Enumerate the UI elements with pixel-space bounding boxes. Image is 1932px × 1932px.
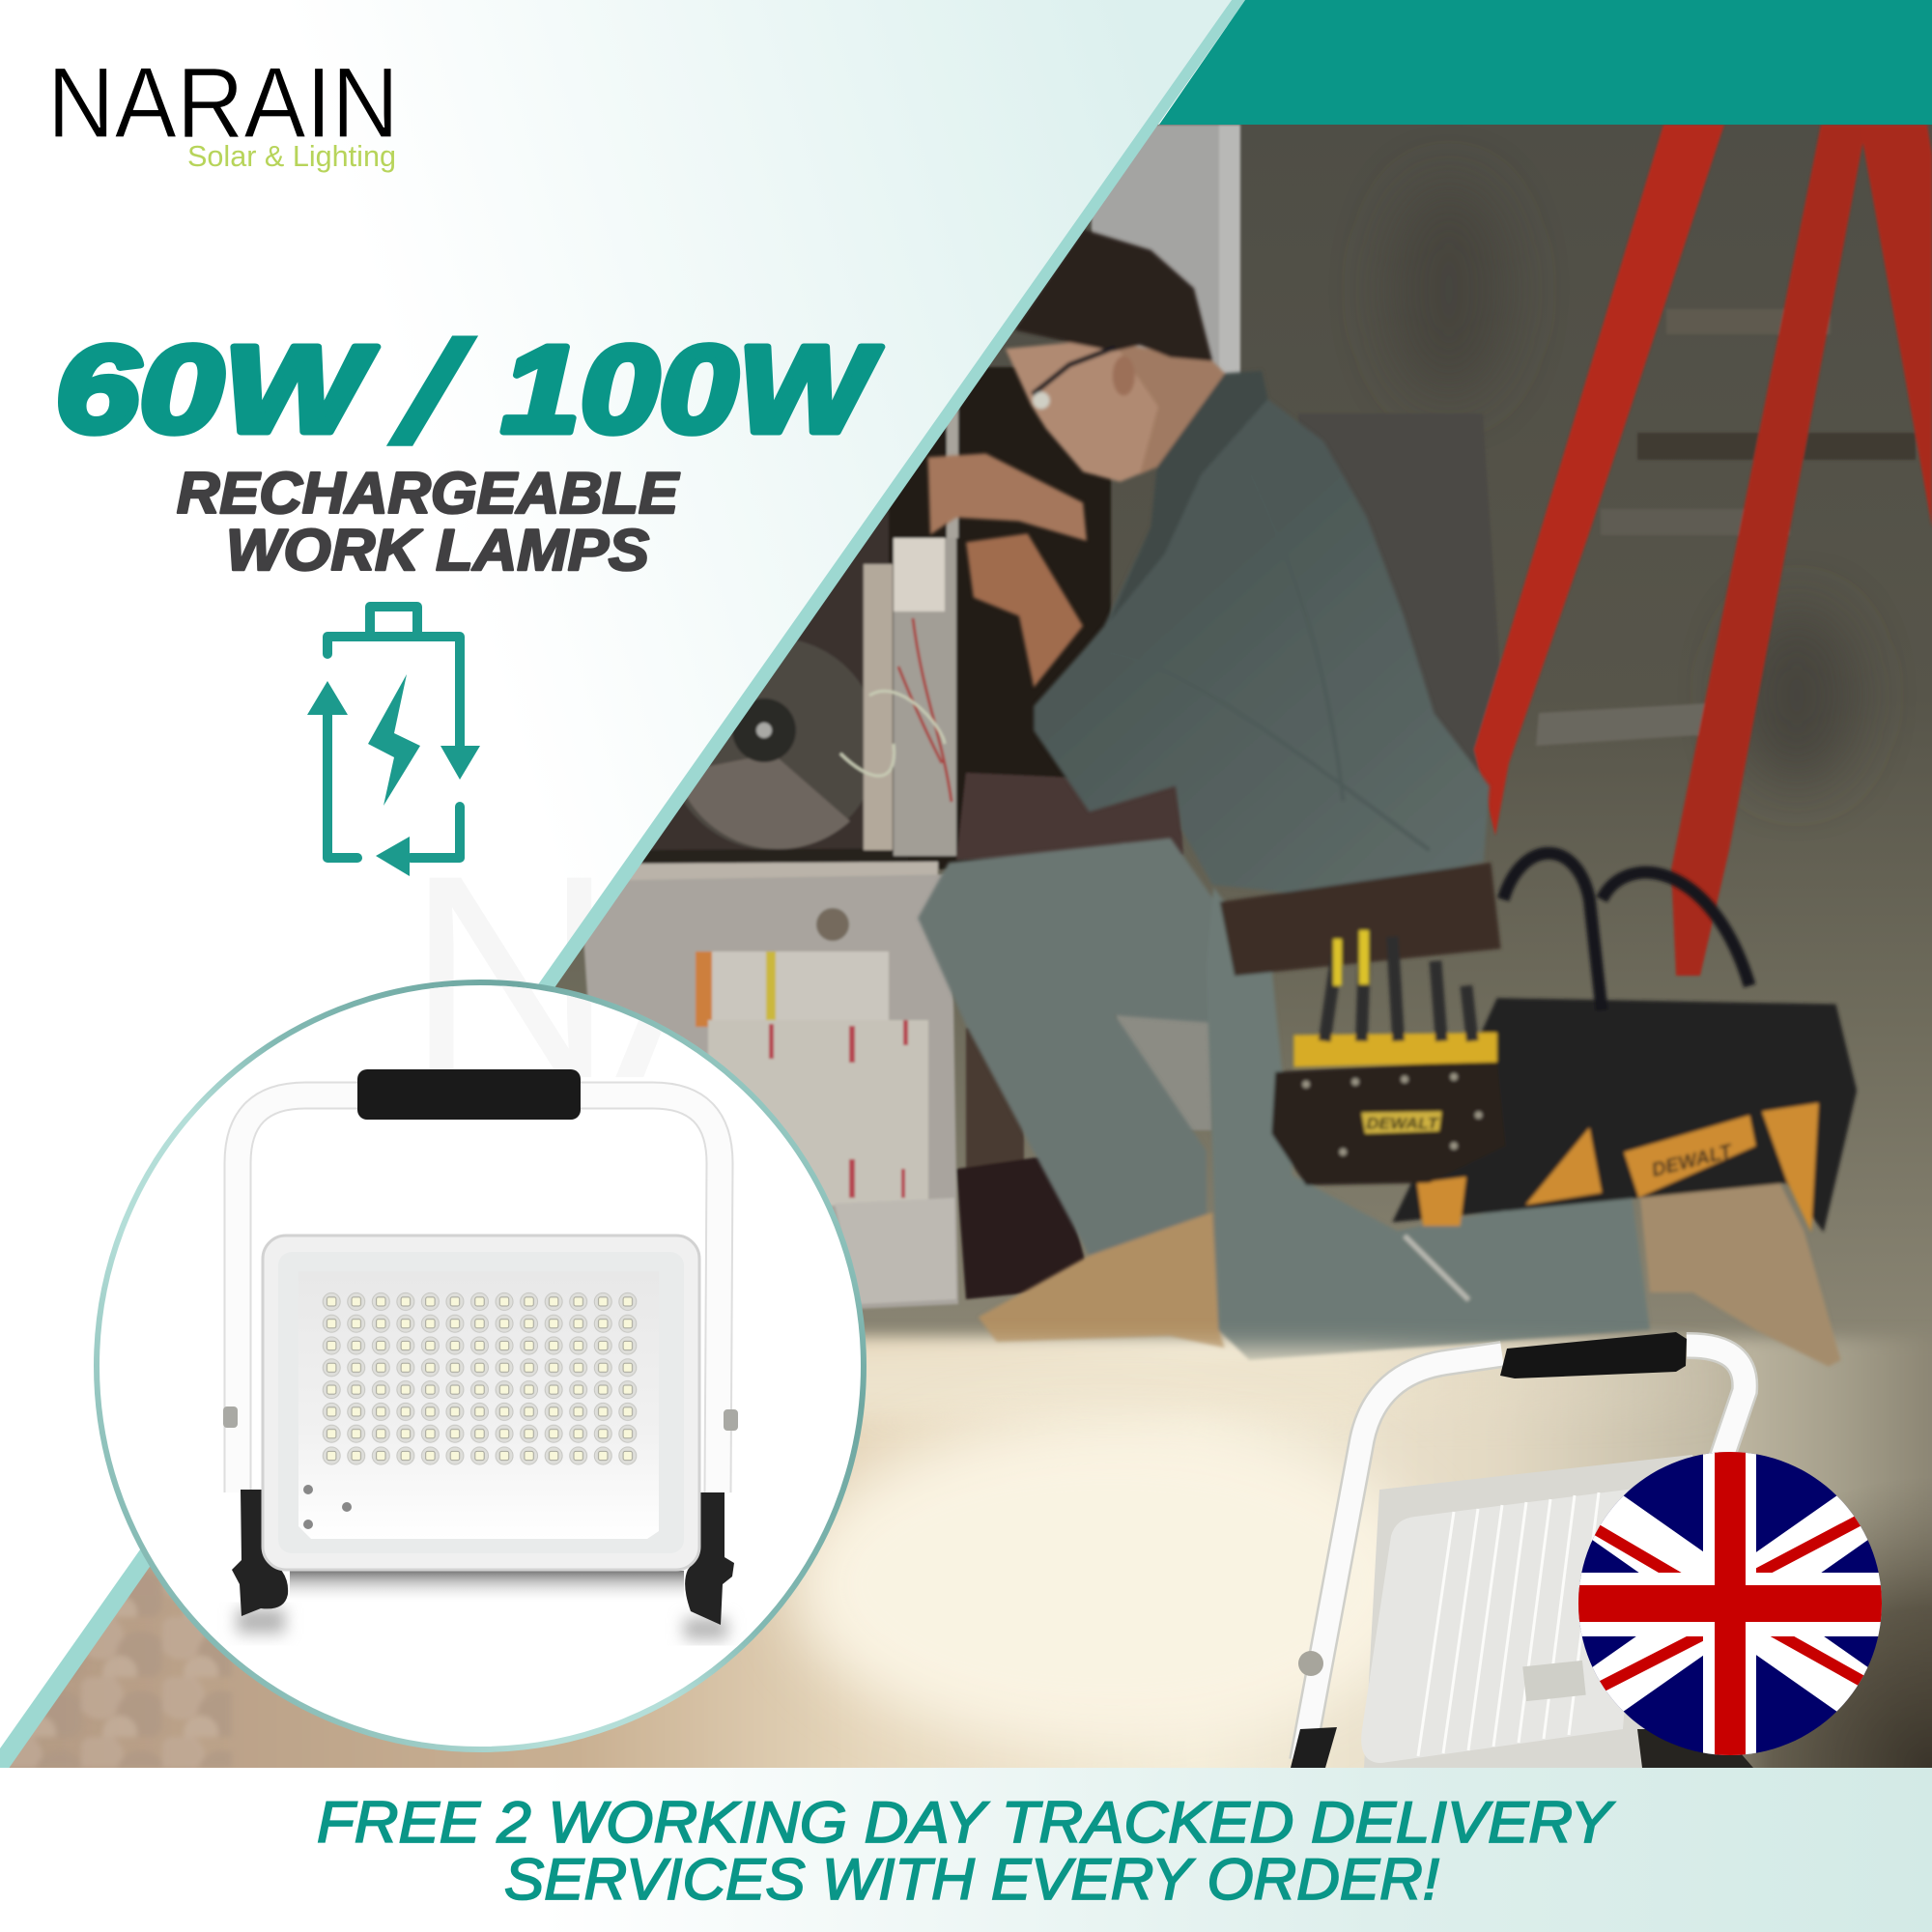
right knob [724, 1409, 738, 1431]
lightning bolt [368, 674, 420, 806]
icon: rechargeable battery [307, 607, 480, 876]
handle tube [238, 1095, 720, 1492]
bottom delivery strip [0, 1768, 1932, 1932]
title slash: / [388, 317, 475, 469]
flag: United Kingdom [1565, 1452, 1895, 1755]
battery outline with cycle arrows [327, 637, 460, 858]
lamp sleeve [1291, 1727, 1337, 1768]
lamp body [1361, 1488, 1642, 1763]
red diagonals [1584, 1510, 1879, 1695]
white diagonals [1565, 1488, 1895, 1719]
dark floor corner [1642, 1478, 1932, 1768]
left white panel [0, 0, 1232, 1748]
red cross [1578, 1452, 1882, 1755]
title 60W: 60W [55, 321, 377, 459]
floor fog [0, 1350, 1739, 1418]
top teal bar [1159, 0, 1932, 125]
lamp knob [1298, 1651, 1323, 1676]
circle: product view [97, 814, 864, 1749]
pouch brand: DEWALT [1367, 1114, 1440, 1132]
pouch studs [1302, 1073, 1482, 1155]
diagonal teal band [0, 0, 1245, 1773]
LED array [319, 1291, 640, 1466]
logo wordmark: NARAIN [47, 47, 399, 159]
wall shading patches [1391, 184, 1855, 782]
work lamp front [223, 1069, 738, 1639]
left bracket [232, 1490, 288, 1616]
housing [263, 1236, 699, 1570]
right bracket [685, 1492, 734, 1625]
logo [47, 47, 399, 173]
furnace [541, 367, 1212, 1314]
subtitle line 1: RECHARGEABLE [177, 461, 680, 526]
concrete wall [554, 125, 1932, 1350]
delivery message [317, 1790, 1615, 1912]
delivery line 1: FREE 2 WORKING DAY TRACKED DELIVERY [317, 1790, 1615, 1855]
bag brand: DEWALT [1650, 1141, 1735, 1181]
man [918, 229, 1857, 1367]
lamp rating plate [1522, 1661, 1586, 1701]
navy field [1578, 1452, 1882, 1755]
title: wattage [55, 317, 882, 469]
title 100W: 100W [501, 321, 882, 459]
subtitle line 2: WORK LAMPS [226, 518, 649, 582]
cycle arrowheads [307, 681, 480, 876]
head [1005, 340, 1160, 483]
front leg [1207, 887, 1650, 1360]
lamp ribs [1418, 1492, 1599, 1756]
lamp foot [1637, 1729, 1753, 1768]
battery cap [370, 607, 417, 634]
circle background [97, 982, 864, 1749]
watermark: NA [406, 814, 810, 1139]
circle watermark: NA [406, 814, 810, 1139]
subtitle [177, 461, 680, 582]
pebbled floor patch [10, 1599, 228, 1767]
floor glow [792, 1420, 1430, 1748]
grip [357, 1069, 581, 1120]
foot shadows [237, 1608, 727, 1639]
left knob [223, 1406, 238, 1428]
lamp reverse view [1291, 1332, 1753, 1768]
floor [10, 1327, 1932, 1768]
inner face [278, 1252, 684, 1553]
sensor dots [303, 1485, 352, 1529]
boots [979, 1212, 1225, 1348]
lamp tube [1302, 1346, 1745, 1761]
reflector panel [298, 1271, 659, 1539]
shirt [1034, 371, 1490, 897]
lamp grip [1500, 1332, 1687, 1378]
ground shadow [290, 1571, 684, 1604]
hands [927, 453, 1087, 541]
handle outline [238, 1095, 720, 1492]
delivery line 2: SERVICES WITH EVERY ORDER! [504, 1847, 1439, 1912]
tool bag [1392, 998, 1857, 1233]
lamp housing back [1364, 1455, 1739, 1768]
white cross [1578, 1452, 1882, 1755]
tool belt [1220, 863, 1501, 976]
wall scene details [1092, 125, 1932, 976]
rear leg [918, 838, 1213, 1256]
logo tagline: Solar & Lighting [187, 139, 396, 173]
lamp tube highlight [1302, 1346, 1745, 1761]
